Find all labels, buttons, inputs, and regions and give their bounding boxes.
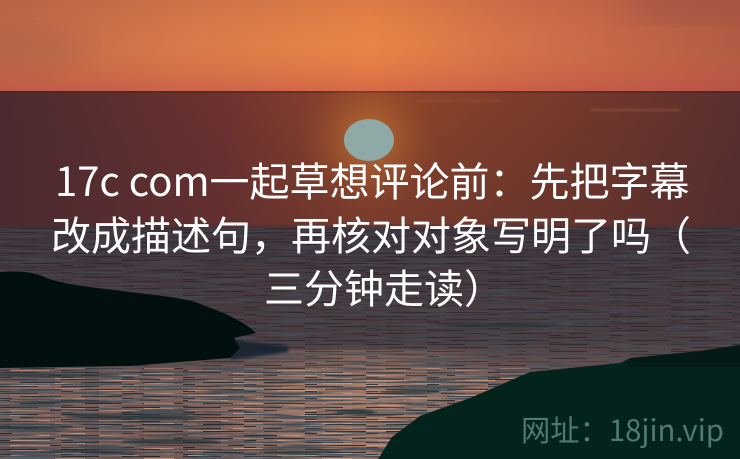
- sun: [344, 119, 394, 161]
- title line 3: 三分钟走读）: [264, 257, 504, 315]
- right island silhouette: [378, 345, 740, 459]
- sky: [0, 0, 740, 92]
- watermark: 网址：18jin.vip: [521, 408, 724, 450]
- title line 1: 17c com一起草想评论前：先把字幕: [55, 150, 689, 208]
- title line 2: 改成描述句，再核对对象写明了吗（: [51, 204, 691, 262]
- left island silhouette: [0, 271, 288, 368]
- water streaks: [0, 323, 560, 454]
